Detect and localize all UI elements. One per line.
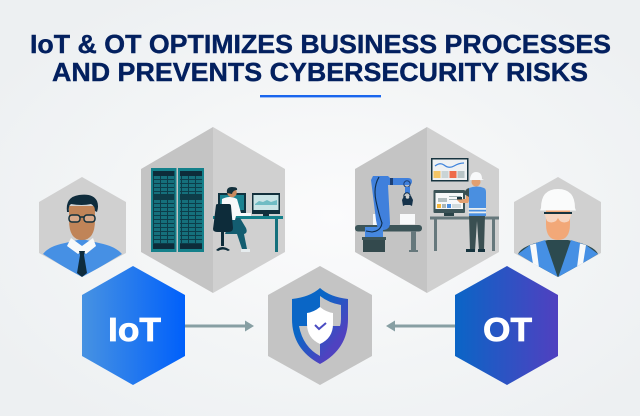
hair xyxy=(67,195,98,212)
server racks xyxy=(151,168,204,252)
conveyor belt xyxy=(355,214,422,252)
shirt xyxy=(43,239,122,278)
seated engineer xyxy=(213,187,251,252)
icon: security shield xyxy=(292,288,348,364)
OT hexagon xyxy=(455,266,558,385)
collar xyxy=(67,238,96,254)
panel: data center hexagon xyxy=(141,127,285,293)
desk with monitors xyxy=(213,193,283,252)
dark shirt xyxy=(518,240,598,278)
arrow: OT to shield xyxy=(386,320,455,332)
title: AND PREVENTS CYBERSECURITY RISKS xyxy=(52,57,588,87)
vest xyxy=(518,240,558,278)
standing worker xyxy=(457,172,486,252)
desk with monitor xyxy=(430,190,499,251)
OT hexagon: OT xyxy=(483,311,532,348)
title underline xyxy=(260,95,381,97)
tie xyxy=(77,251,87,277)
infographic canvas xyxy=(32,34,610,385)
neck and face xyxy=(69,206,95,240)
title: IoT & OT OPTIMIZES BUSINESS PROCESSES xyxy=(30,29,611,59)
title xyxy=(30,29,611,87)
panel: factory hexagon xyxy=(355,127,499,293)
hard hat xyxy=(540,189,576,210)
wall dashboard xyxy=(431,158,468,182)
safety goggles xyxy=(544,214,572,222)
IoT hexagon: IoT xyxy=(108,311,161,348)
panel: OT worker portrait hexagon xyxy=(514,177,601,278)
panel: IT worker portrait hexagon xyxy=(39,177,126,278)
IoT hexagon xyxy=(82,266,185,385)
robot arm xyxy=(365,176,413,237)
face xyxy=(546,208,570,240)
arrow: IoT to shield xyxy=(185,320,254,332)
glasses xyxy=(69,215,95,222)
shield hexagon xyxy=(268,266,372,385)
